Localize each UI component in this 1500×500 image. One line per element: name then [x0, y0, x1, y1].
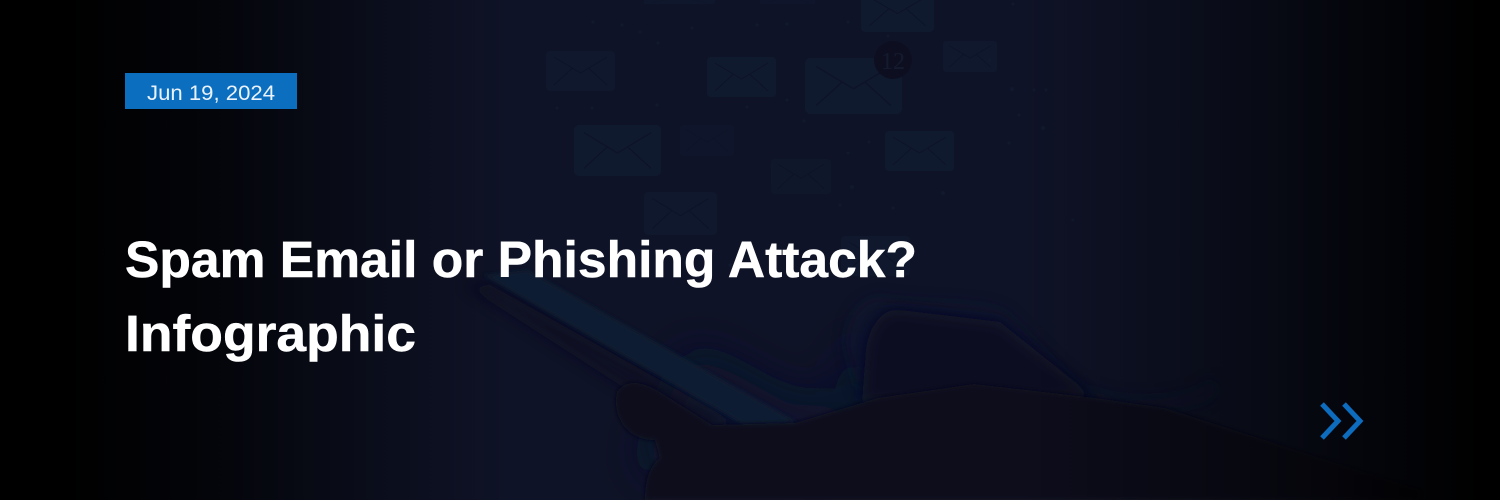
icon: large envelope — [805, 58, 902, 114]
email icons — [546, 0, 1074, 276]
icon: notification badge — [874, 41, 912, 79]
icon: envelope — [885, 131, 954, 171]
date badge — [125, 73, 297, 109]
date badge: Jun 19, 2024 — [147, 82, 275, 105]
thumb shadow — [862, 310, 1095, 402]
photo: hand holding phone — [465, 270, 1420, 500]
title line 1: Spam Email or Phishing Attack? — [125, 231, 917, 288]
icon: envelope — [861, 0, 934, 32]
icon: envelope — [644, 192, 717, 235]
particles — [556, 2, 1074, 266]
phone underside — [465, 285, 740, 430]
title — [125, 231, 917, 362]
icon: envelope — [707, 57, 776, 97]
icon: envelope — [574, 125, 661, 176]
arrow: double chevron — [1322, 404, 1360, 438]
icon: envelope — [644, 0, 715, 4]
glow below the phone — [640, 330, 880, 470]
phone edge highlight — [483, 270, 799, 425]
icon: notification badge: 12 — [881, 49, 905, 75]
icon: envelope — [760, 0, 815, 4]
icon: envelope — [771, 159, 831, 194]
icon: envelope — [680, 125, 734, 156]
icon: envelope — [943, 41, 997, 72]
icon: envelope — [546, 51, 615, 91]
thumb outline — [846, 297, 1218, 409]
hand silhouette — [616, 383, 1420, 500]
icon: envelope — [841, 236, 910, 276]
title line 2: Infographic — [125, 305, 416, 362]
